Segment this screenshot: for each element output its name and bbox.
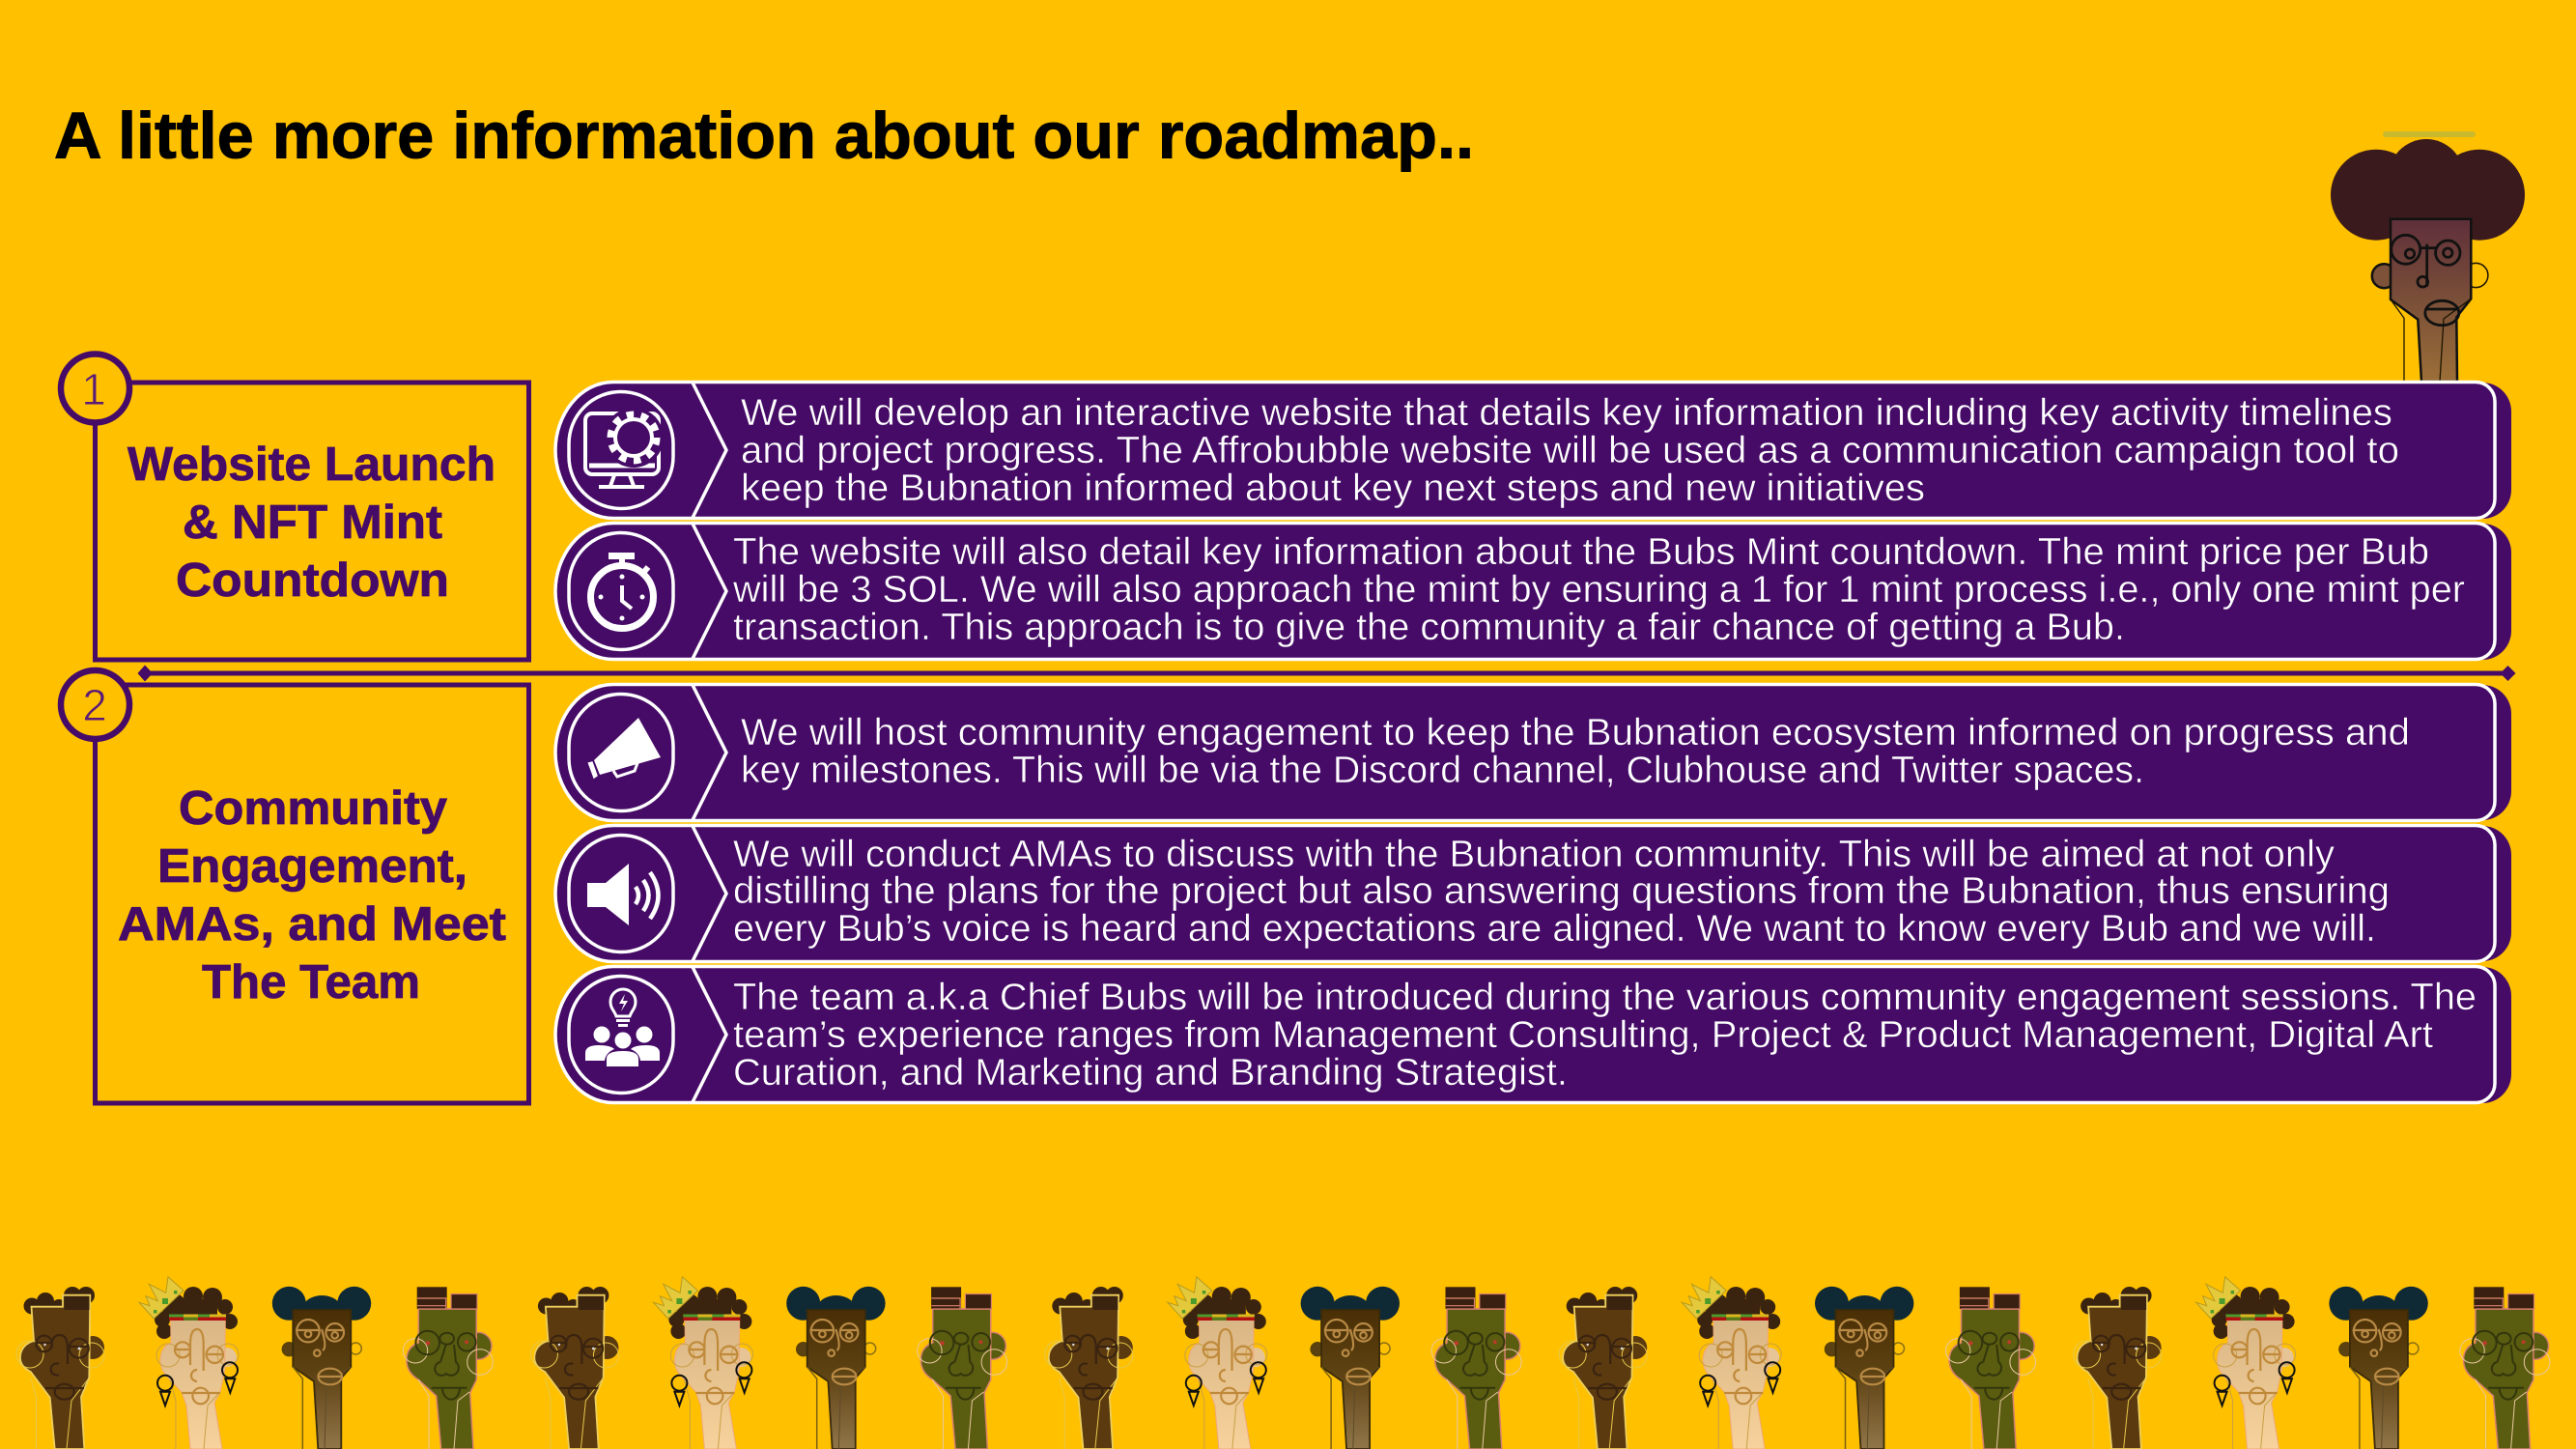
icon: megaphone [589,718,661,778]
heading: section 2: Engagement, [157,840,467,893]
number badge 1 [61,354,129,423]
body text [732,531,2465,648]
body text [733,977,2477,1094]
body text: every Bub’s voice is heard and expectations are aligned. We want to know every Bub and we will. [733,908,2376,950]
heading: section 1: & NFT Mint [183,497,442,549]
body text: Curation, and Marketing and Branding Strategist. [733,1052,1568,1094]
body text: The team a.k.a Chief Bubs will be introduced during the various community engagement sessions. The [733,977,2477,1018]
body text: The website will also detail key information about the Bubs Mint countdown. The mint price per Bub [733,531,2429,573]
character group 1 [16,1277,493,1449]
character group 5 [2074,1277,2550,1449]
panel: section 2 title box [95,685,529,1103]
body text [741,712,2410,791]
title: A little more information about our roadmap.. [54,99,1474,172]
character group 4 [1559,1277,2036,1449]
number badge 2 [61,670,129,739]
heading: section 1: Website Launch [127,439,495,491]
number badge 2: 2 [82,680,107,730]
heading: section 2 [118,782,506,1009]
icon: stopwatch [591,553,653,628]
character: afro with glasses peeking above the panels [2331,131,2525,382]
character row along the bottom [16,1277,2550,1449]
body text: and project progress. The Affrobubble website will be used as a communication campaign tool to [741,430,2399,471]
body text: key milestones. This will be via the Discord channel, Clubhouse and Twitter spaces. [741,750,2144,791]
body text: keep the Bubnation informed about key next steps and new initiatives [741,468,1925,509]
character group 2 [530,1277,1007,1449]
body text: will be 3 SOL. We will also approach the mint by ensuring a 1 for 1 mint process i.e., only one mint per [732,569,2465,611]
body text: team’s experience ranges from Management Consulting, Project & Product Management, Digital Art [733,1014,2433,1056]
body text: We will host community engagement to keep the Bubnation ecosystem informed on progress and [741,712,2410,753]
body text: We will conduct AMAs to discuss with the Bubnation community. This will be aimed at not only [733,834,2335,875]
body text: distilling the plans for the project but also answering questions from the Bubnation, thus ensuring [733,870,2390,912]
icon: monitor with gear [585,408,664,487]
heading: section 1 [127,439,495,607]
body text [733,834,2390,950]
number badge 1: 1 [81,364,106,414]
icon: speaker [587,864,659,925]
section divider line with diamonds [137,665,2515,682]
icon: team with lightbulb [585,989,660,1066]
panel: community engagement row [555,684,2511,821]
panel: meet the team row [555,966,2511,1103]
body text: transaction. This approach is to give the community a fair chance of getting a Bub. [733,607,2125,648]
character group 3 [1045,1277,1521,1449]
heading: section 2: Community [179,782,447,835]
body text [741,392,2399,509]
heading: section 1: Countdown [176,554,449,607]
panel: website row [555,383,2511,519]
panel: section 1 title box [95,383,529,660]
heading: section 2: The Team [202,956,420,1009]
heading: section 2: AMAs, and Meet [118,898,506,951]
body text: We will develop an interactive website that details key information including key activity timelines [741,392,2392,434]
panel: AMAs row [555,825,2511,962]
panel: mint countdown row [555,524,2511,660]
